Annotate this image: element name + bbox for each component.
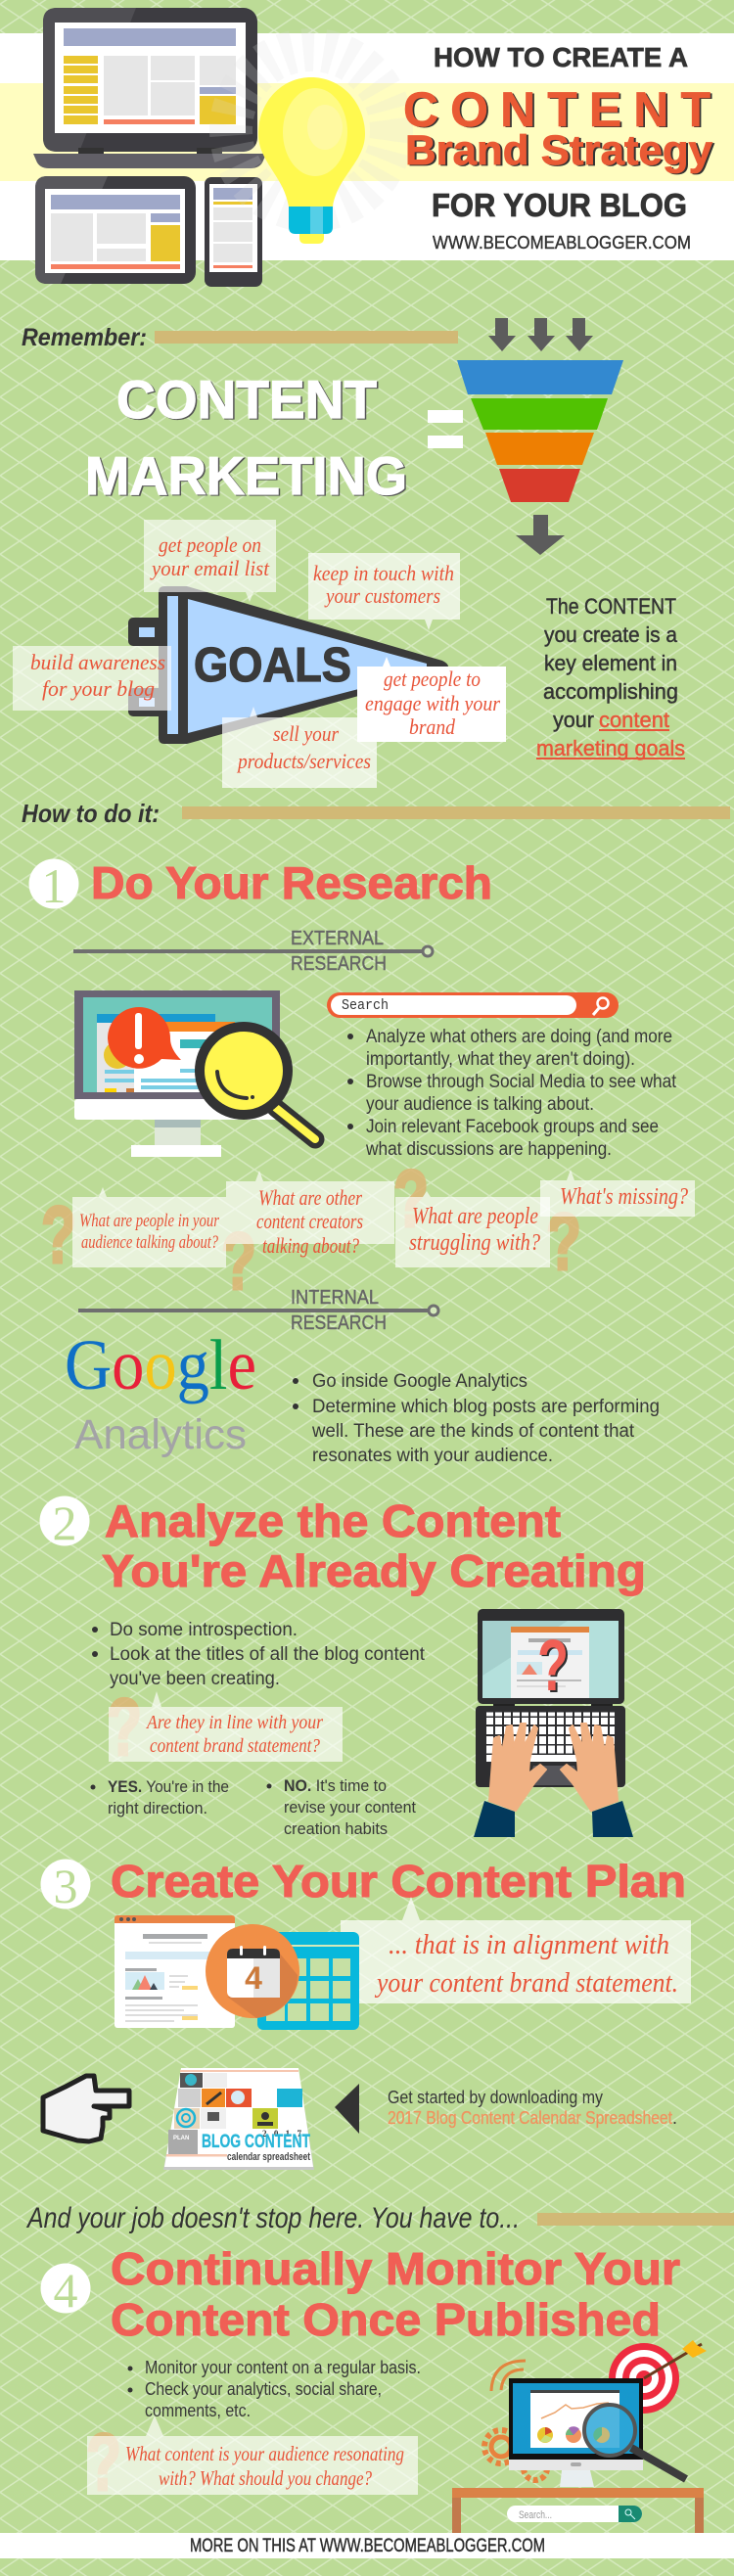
heading: how to do it bbox=[22, 799, 730, 828]
label: internal research: RESEARCH bbox=[291, 1312, 387, 1334]
list: no answer bbox=[266, 1776, 416, 1838]
search bar bbox=[327, 992, 619, 1018]
callout: email list: get people on bbox=[159, 532, 261, 557]
icon: signal arcs bbox=[491, 2361, 526, 2391]
list: monitor bullets: comments, etc. bbox=[145, 2401, 251, 2420]
text block: content goals bbox=[536, 594, 685, 760]
list: internal research bullets: Go inside Google Analytics bbox=[312, 1371, 528, 1392]
callout: build awareness bbox=[13, 646, 171, 711]
callout: keep in touch: keep in touch with bbox=[313, 561, 454, 585]
text block: content goals: your bbox=[553, 708, 594, 732]
callout: other creators: What are other bbox=[258, 1185, 362, 1210]
list: internal research bullets bbox=[293, 1371, 660, 1466]
step 1 badge bbox=[29, 858, 78, 913]
callout: what's missing: What's missing? bbox=[560, 1184, 688, 1210]
callout: other creators: talking about? bbox=[262, 1233, 359, 1258]
callout: sell your products: products/services bbox=[236, 749, 371, 773]
step 4 badge: 4 bbox=[53, 2263, 78, 2318]
callout: what's missing bbox=[540, 1170, 695, 1217]
text: download offer: Get started by downloading my bbox=[388, 2088, 603, 2107]
list: yes answer: right direction. bbox=[108, 1799, 207, 1817]
icon: tablet bbox=[35, 176, 196, 284]
header band bbox=[0, 33, 734, 260]
callout: alignment bbox=[341, 1897, 691, 2003]
icon: orange calendar badge: 4 bbox=[245, 1960, 262, 1996]
content marketing text bbox=[85, 369, 409, 507]
heading: remember: Remember: bbox=[22, 324, 147, 351]
callout: brand statement question: ? bbox=[107, 1681, 142, 1772]
heading: analyze the content: Analyze the Content bbox=[105, 1495, 561, 1546]
text block: content goals: you create is a bbox=[544, 622, 678, 647]
title: CONTENT bbox=[405, 83, 712, 138]
icon: spreadsheet cover: BLOG CONTENT bbox=[202, 2132, 310, 2152]
list: yes answer: YES. You're in the bbox=[108, 1777, 229, 1796]
content marketing text: CONTENT bbox=[116, 369, 377, 430]
list: no answer: revise your content bbox=[284, 1798, 416, 1817]
list: monitor bullets: Check your analytics, social share, bbox=[145, 2379, 382, 2399]
icon: arrow below funnel bbox=[516, 515, 565, 555]
content marketing text: MARKETING bbox=[86, 446, 409, 507]
list: introspection bullets: Do some introspection. bbox=[110, 1620, 298, 1640]
list: no answer: creation habits bbox=[284, 1819, 388, 1838]
step 1 badge: 1 bbox=[41, 858, 67, 913]
text block: content goals: key element in bbox=[544, 651, 677, 675]
callout: sell your products: sell your bbox=[273, 721, 339, 746]
icon: phone bbox=[205, 177, 262, 287]
callout: brand statement question: content brand statement? bbox=[150, 1735, 320, 1757]
callout: audience talking: audience talking about? bbox=[81, 1232, 218, 1253]
heading: how to do it: How to do it: bbox=[22, 799, 160, 828]
chart: funnel bbox=[457, 360, 623, 502]
icon: laptop with hands bbox=[474, 1609, 633, 1837]
title: CONTENT bbox=[403, 82, 711, 137]
callout: email list: your email list bbox=[150, 556, 270, 580]
question marks bbox=[41, 1153, 581, 1307]
icon: gears bbox=[484, 2430, 547, 2480]
icon: calendar grid bbox=[257, 1932, 359, 2030]
callout: build awareness: for your blog bbox=[42, 676, 155, 701]
heading: continually monitor bbox=[111, 2243, 680, 2345]
callout: audience talking bbox=[72, 1187, 226, 1267]
icon: laptop bbox=[33, 8, 266, 168]
icon: light bulb bbox=[258, 77, 365, 244]
footer band: MORE ON THIS AT WWW.BECOMEABLOGGER.COM bbox=[190, 2536, 545, 2556]
callout: alignment: ... that is in alignment with bbox=[389, 1929, 669, 1960]
list: external research bullets bbox=[347, 1027, 677, 1160]
icon: light rays bbox=[231, 50, 391, 210]
list: introspection bullets: Look at the titles of all the blog content bbox=[110, 1644, 426, 1665]
label: external research: EXTERNAL bbox=[291, 928, 384, 949]
icon: megaphone goals bbox=[128, 586, 448, 744]
callout: alignment: your content brand statement. bbox=[374, 1967, 678, 1999]
icon: browser window bbox=[115, 1915, 235, 2028]
icon: spreadsheet cover: 2017 bbox=[262, 2129, 301, 2139]
callout: audience resonating bbox=[86, 2415, 418, 2507]
list: external research bullets: Analyze what others are doing (and more bbox=[366, 1027, 672, 1047]
title: FOR YOUR BLOG bbox=[432, 187, 687, 223]
callout: build awareness: build awareness bbox=[30, 650, 165, 674]
callout: keep in touch: your customers bbox=[324, 583, 440, 608]
text: download offer bbox=[388, 2088, 677, 2128]
heading: analyze the content bbox=[102, 1495, 646, 1596]
heading: create your content plan: Create Your Content Plan bbox=[111, 1856, 686, 1907]
icon: three down arrows bbox=[488, 318, 593, 351]
title: WWW.BECOMEABLOGGER.COM bbox=[433, 233, 691, 253]
callout: keep in touch bbox=[308, 553, 460, 630]
callout: audience resonating: ? bbox=[86, 2416, 121, 2507]
icon: spreadsheet cover: PLAN bbox=[173, 2136, 189, 2141]
label: external research bbox=[73, 928, 433, 975]
callout: brand statement question: Are they in line with your bbox=[145, 1712, 323, 1733]
list: internal research bullets: well. These are the kinds of content that bbox=[311, 1421, 635, 1442]
list: introspection bullets: you've been creating. bbox=[110, 1669, 280, 1689]
heading: analyze the content: You're Already Creating bbox=[102, 1545, 646, 1596]
text: download offer: . bbox=[672, 2108, 677, 2128]
google analytics logo: Analytics bbox=[74, 1411, 247, 1458]
search box on desk bbox=[507, 2506, 642, 2522]
callout: other creators bbox=[226, 1171, 394, 1258]
question marks: ? bbox=[393, 1153, 429, 1244]
text block: content goals: content bbox=[599, 708, 669, 732]
step 4 badge bbox=[41, 2263, 90, 2318]
icon: laptop with hands: ? bbox=[539, 1626, 571, 1709]
callout: other creators: content creators bbox=[256, 1209, 363, 1233]
icon: pointing hand bbox=[43, 2076, 129, 2141]
title: Brand Strategy bbox=[405, 127, 712, 174]
text block: content goals: marketing goals bbox=[536, 736, 685, 760]
step 3 badge: 3 bbox=[53, 1859, 78, 1913]
icon: orange calendar badge bbox=[206, 1924, 299, 2018]
list: external research bullets: Browse through Social Media to see what bbox=[366, 1072, 677, 1092]
title bbox=[403, 42, 714, 253]
text: download offer: 2017 Blog Content Calendar Spreadsheet bbox=[388, 2108, 672, 2128]
footer band bbox=[0, 2533, 734, 2558]
callout: struggling: What are people bbox=[412, 1204, 538, 1229]
icon: left arrow triangle bbox=[335, 2084, 359, 2134]
callout: struggling: struggling with? bbox=[409, 1230, 540, 1256]
heading: your job doesn't stop: And your job doesn't stop here. You have to... bbox=[25, 2202, 520, 2234]
step 2 badge bbox=[39, 1495, 90, 1550]
label: internal research: INTERNAL bbox=[291, 1287, 379, 1309]
icon: spreadsheet cover: calendar spreadsheet bbox=[227, 2151, 310, 2163]
list: internal research bullets: Determine which blog posts are performing bbox=[312, 1397, 660, 1417]
list: external research bullets: your audience is talking about. bbox=[366, 1094, 594, 1115]
icon: laptop with hands: ? bbox=[537, 1625, 569, 1706]
list: external research bullets: Join relevant Facebook groups and see bbox=[366, 1117, 659, 1137]
title: Brand Strategy bbox=[407, 128, 714, 175]
icon: target with arrow bbox=[609, 2340, 707, 2414]
label: external research: RESEARCH bbox=[291, 953, 387, 975]
callout: audience resonating: What content is your audience resonating bbox=[125, 2442, 404, 2465]
question marks: ? bbox=[221, 1216, 256, 1307]
text block: content goals: accomplishing bbox=[543, 679, 678, 704]
heading: continually monitor: Continually Monitor Your bbox=[111, 2243, 680, 2294]
list: internal research bullets: resonates with your audience. bbox=[312, 1446, 553, 1466]
question marks: ? bbox=[546, 1196, 581, 1287]
search box on desk: Search... bbox=[519, 2509, 552, 2521]
list: external research bullets: what discussions are happening. bbox=[365, 1139, 612, 1160]
icon: spreadsheet cover bbox=[163, 2068, 314, 2170]
content marketing text: MARKETING bbox=[85, 445, 407, 506]
list: yes answer bbox=[90, 1777, 229, 1817]
question marks: ? bbox=[41, 1189, 76, 1280]
callout: sell your products bbox=[222, 707, 377, 788]
list: no answer: NO. It's time to bbox=[284, 1776, 387, 1795]
callout: audience talking: What are people in your bbox=[79, 1211, 219, 1231]
google analytics logo bbox=[65, 1325, 256, 1458]
list: monitor bullets bbox=[127, 2358, 421, 2420]
icon: monitor with magnifier bbox=[74, 990, 315, 1157]
label: internal research bbox=[78, 1287, 438, 1334]
callout: engage with brand: engage with your bbox=[365, 691, 500, 715]
list: external research bullets: importantly, what they aren't doing). bbox=[366, 1049, 635, 1070]
callout: engage with brand bbox=[357, 657, 506, 742]
google analytics logo: Google bbox=[65, 1325, 256, 1404]
heading: remember bbox=[22, 324, 458, 351]
icon: desk bbox=[452, 2488, 704, 2533]
icon: analytics monitor with magnifier bbox=[509, 2378, 686, 2487]
title: HOW TO CREATE A bbox=[434, 42, 688, 72]
callout: brand statement question bbox=[107, 1681, 343, 1772]
callout: email list bbox=[144, 520, 276, 602]
heading: continually monitor: Content Once Published bbox=[111, 2294, 661, 2345]
callout: engage with brand: brand bbox=[409, 714, 456, 739]
step 3 badge bbox=[41, 1859, 90, 1913]
heading: do your research: Do Your Research bbox=[91, 857, 492, 908]
list: introspection bullets bbox=[92, 1620, 426, 1689]
callout: struggling bbox=[395, 1191, 550, 1267]
list: monitor bullets: Monitor your content on a regular basis. bbox=[145, 2358, 421, 2377]
icon: megaphone goals: GOALS bbox=[194, 639, 351, 692]
step 2 badge: 2 bbox=[53, 1495, 76, 1550]
callout: engage with brand: get people to bbox=[384, 667, 481, 691]
callout: audience resonating: with? What should you change? bbox=[159, 2466, 372, 2490]
text block: content goals: The CONTENT bbox=[546, 594, 676, 619]
content marketing text: CONTENT bbox=[117, 370, 378, 431]
equals sign bbox=[428, 410, 463, 448]
search bar: Search bbox=[342, 997, 389, 1014]
